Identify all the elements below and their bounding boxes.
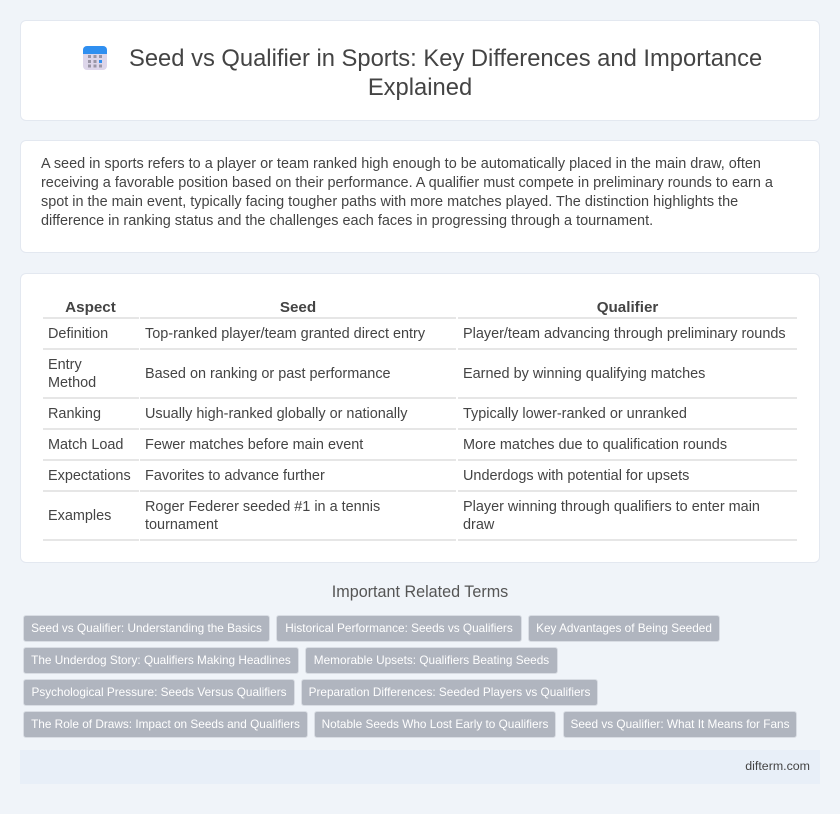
tag: Memorable Upsets: Qualifiers Beating Seeds [314,653,549,667]
table header: Qualifier: Qualifier [597,299,658,316]
tag [23,647,299,674]
row: Ranking: Ranking [48,406,101,422]
text: introduction paragraph: difference in ranking status and the challenges each faces in progressing through a tournament. [41,213,653,229]
panel: comparison table: Roger Federer seeded #1 in a tennis [145,499,380,515]
row: Entry Method: Method [48,375,96,391]
heading: Important Related Terms: Important Related Terms [332,583,508,601]
panel: comparison table: Top-ranked player/team granted direct entry [145,326,425,342]
tag: Seed vs Qualifier: What It Means for Fans [570,717,790,731]
panel: title header [20,20,820,121]
panel: comparison table: Fewer matches before main event [145,437,363,453]
panel: comparison table: More matches due to qualification rounds [463,437,727,453]
panel: comparison table: Underdogs with potential for upsets [463,468,689,484]
tag: The Underdog Story: Qualifiers Making Headlines [31,653,291,667]
text: introduction paragraph [41,156,773,229]
footer bar [20,750,820,784]
tag: Preparation Differences: Seeded Players vs Qualifiers [309,685,590,699]
tags: related terms [23,615,797,738]
heading: page title: Seed vs Qualifier in Sports: Key Differences and Importance [129,45,762,72]
row: Definition: Definition [48,326,108,342]
row: Match Load: Match Load [48,437,123,453]
tag [301,679,598,706]
heading: page title [129,45,762,101]
row: Expectations: Expectations [48,468,131,484]
tag: Historical Performance: Seeds vs Qualifiers [285,621,513,635]
footer: site credit: difterm.com [745,759,810,773]
tag: Psychological Pressure: Seeds Versus Qualifiers [31,685,287,699]
text: introduction paragraph: spot in the main event, typically facing tougher paths with more matches played. The distinction highlights the [41,194,738,210]
icon: calendar [83,46,107,70]
tag: Notable Seeds Who Lost Early to Qualifiers [322,717,548,731]
panel: comparison table: tournament [145,517,218,533]
row: Examples: Examples [48,508,111,524]
tag [276,615,522,642]
panel: comparison table: Favorites to advance further [145,468,325,484]
panel: comparison table: draw [463,517,494,533]
tag: The Role of Draws: Impact on Seeds and Qualifiers [31,717,300,731]
panel: comparison table [20,273,820,563]
table header: Seed: Seed [280,299,316,316]
tag [23,711,308,738]
text: introduction paragraph: receiving a favorable position based on their performance. A qualifier must compete in preliminary rounds to earn a [41,175,773,191]
table header: Aspect: Aspect [65,299,116,316]
tag [563,711,797,738]
row: Entry Method: Entry [48,357,82,373]
panel: comparison table: Player winning through qualifiers to enter main [463,499,760,515]
text: introduction paragraph: A seed in sports refers to a player or team ranked high enough to be automatically placed in the main draw, often [41,156,761,172]
tag: Key Advantages of Being Seeded [536,621,712,635]
tag [305,647,558,674]
tag [528,615,720,642]
tag [23,679,295,706]
row: Entry Method [48,357,96,391]
panel: comparison table: Usually high-ranked globally or nationally [145,406,407,422]
panel: introduction [20,140,820,253]
panel: comparison table: Typically lower-ranked or unranked [463,406,687,422]
tag [23,615,270,642]
panel: comparison table: Based on ranking or past performance [145,366,391,382]
tag: Seed vs Qualifier: Understanding the Basics [31,621,262,635]
panel: comparison table: Player/team advancing through preliminary rounds [463,326,786,342]
tag [314,711,556,738]
heading: page title: Explained [368,74,472,101]
panel: comparison table: Earned by winning qualifying matches [463,366,705,382]
